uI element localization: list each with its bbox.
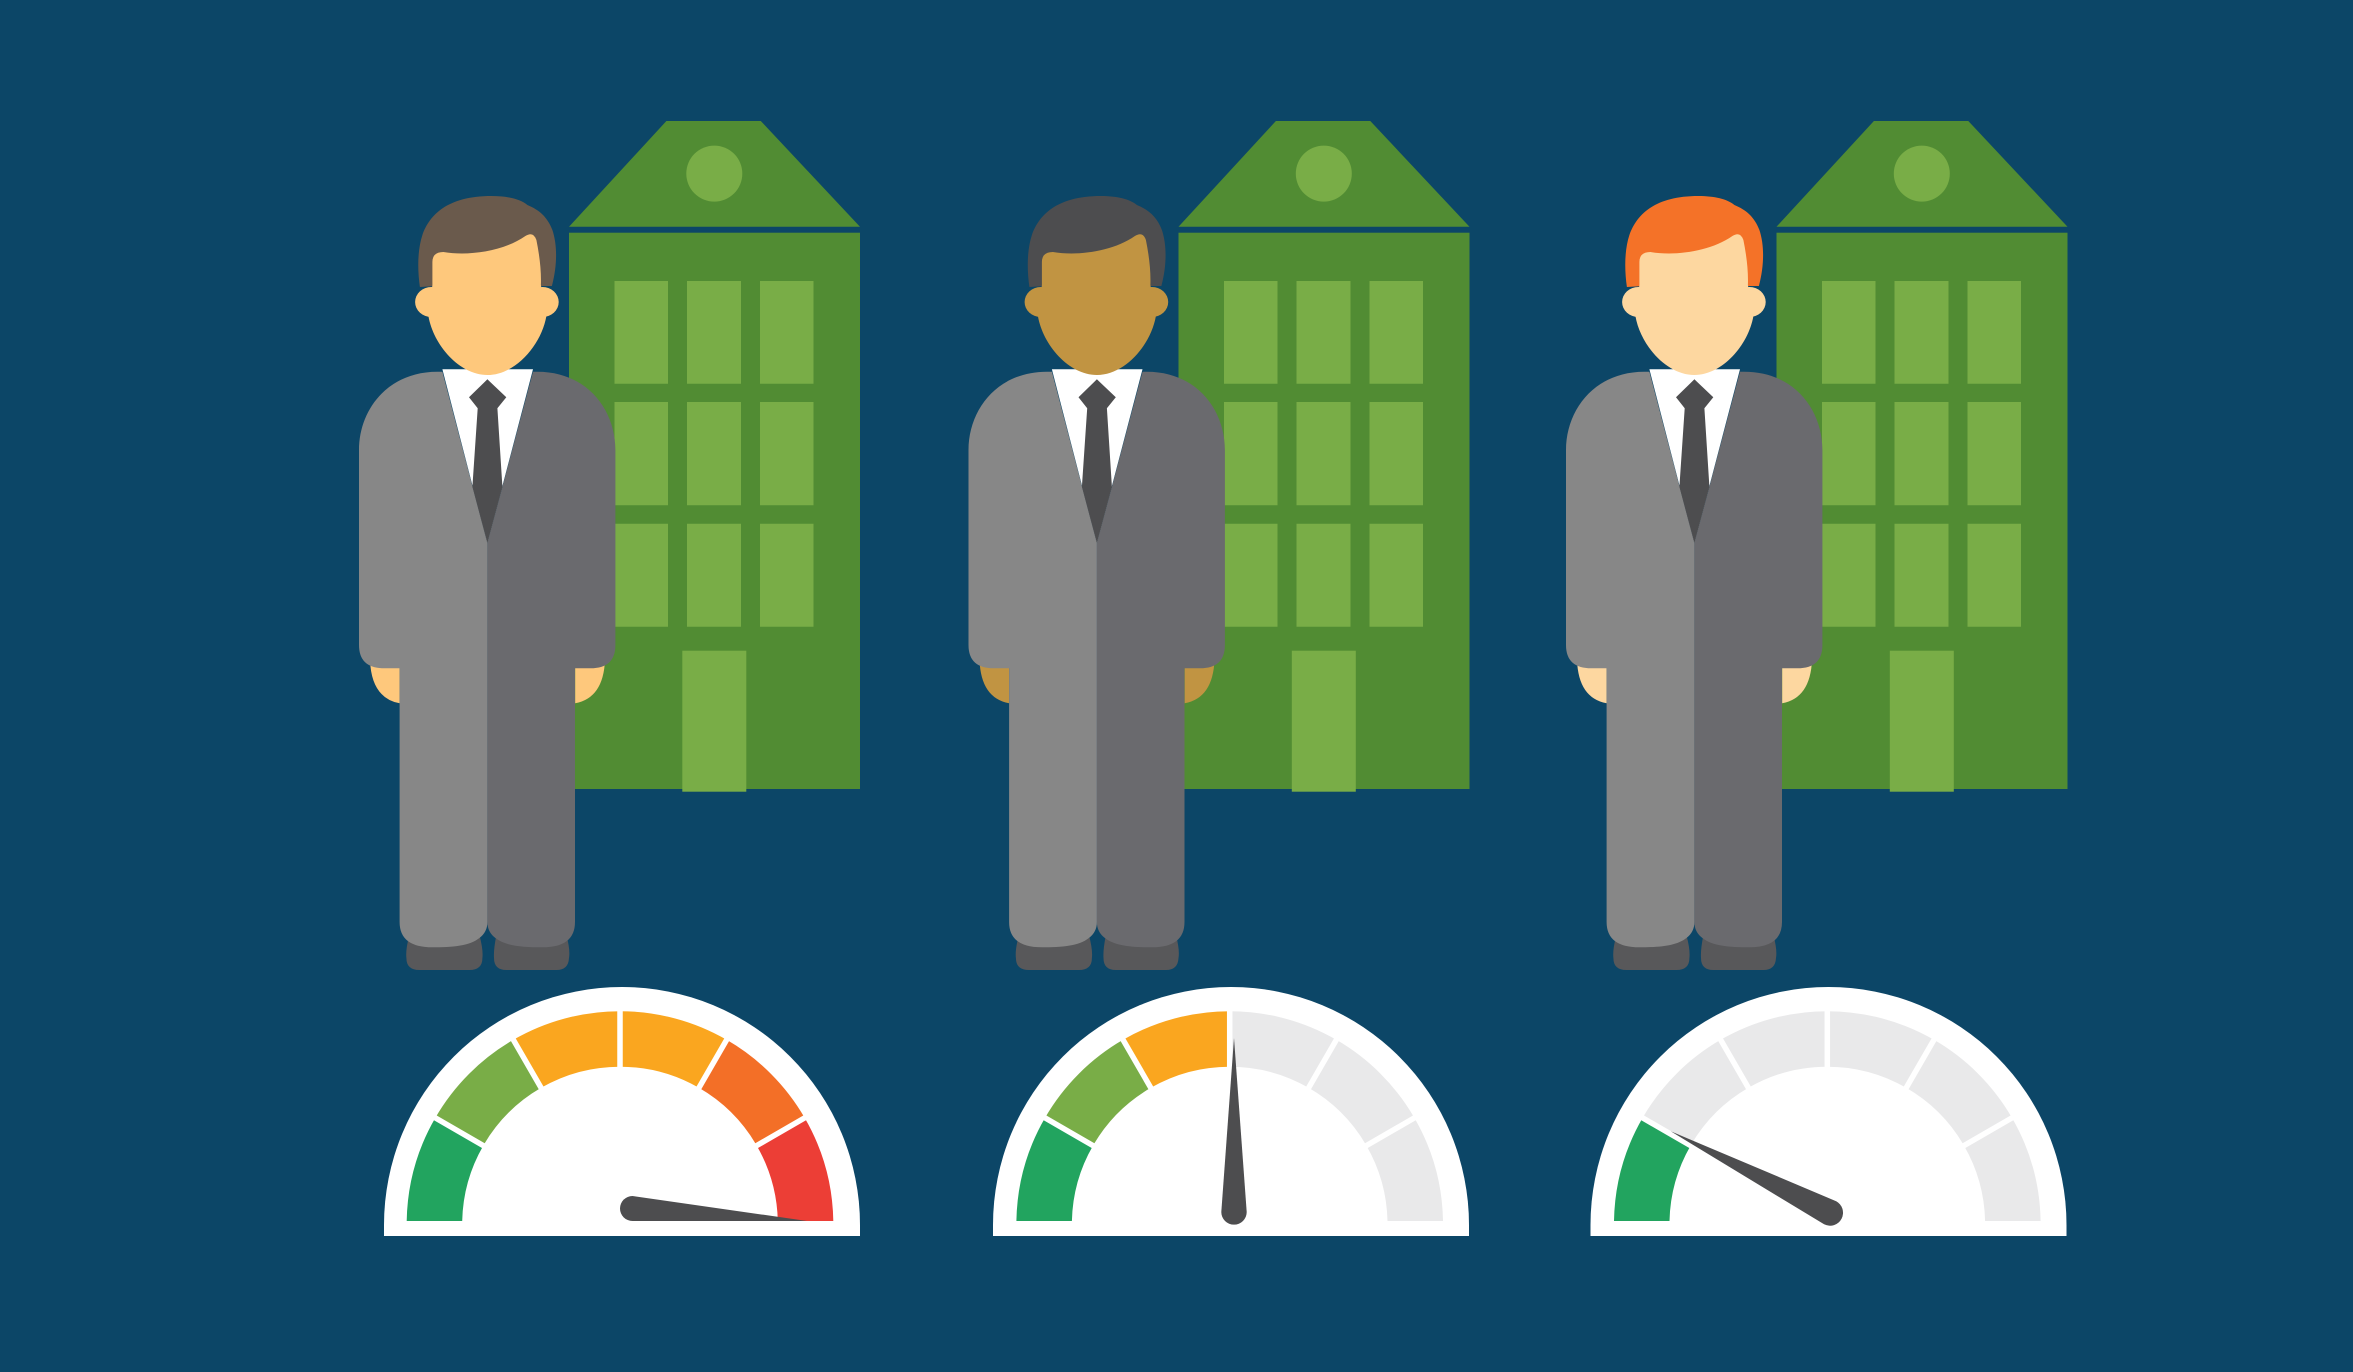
person 1: brown hair [359,196,615,970]
building 3 [1776,121,2068,792]
gauge 1: needle in red [384,987,860,1236]
gauge 3: needle in green [1590,987,2066,1236]
building 1 [569,121,860,792]
person 2: dark hair [968,196,1225,970]
person 3: red hair [1566,196,1822,970]
gauge 2: needle at centre [993,987,1469,1236]
building 2 [1178,121,1470,792]
